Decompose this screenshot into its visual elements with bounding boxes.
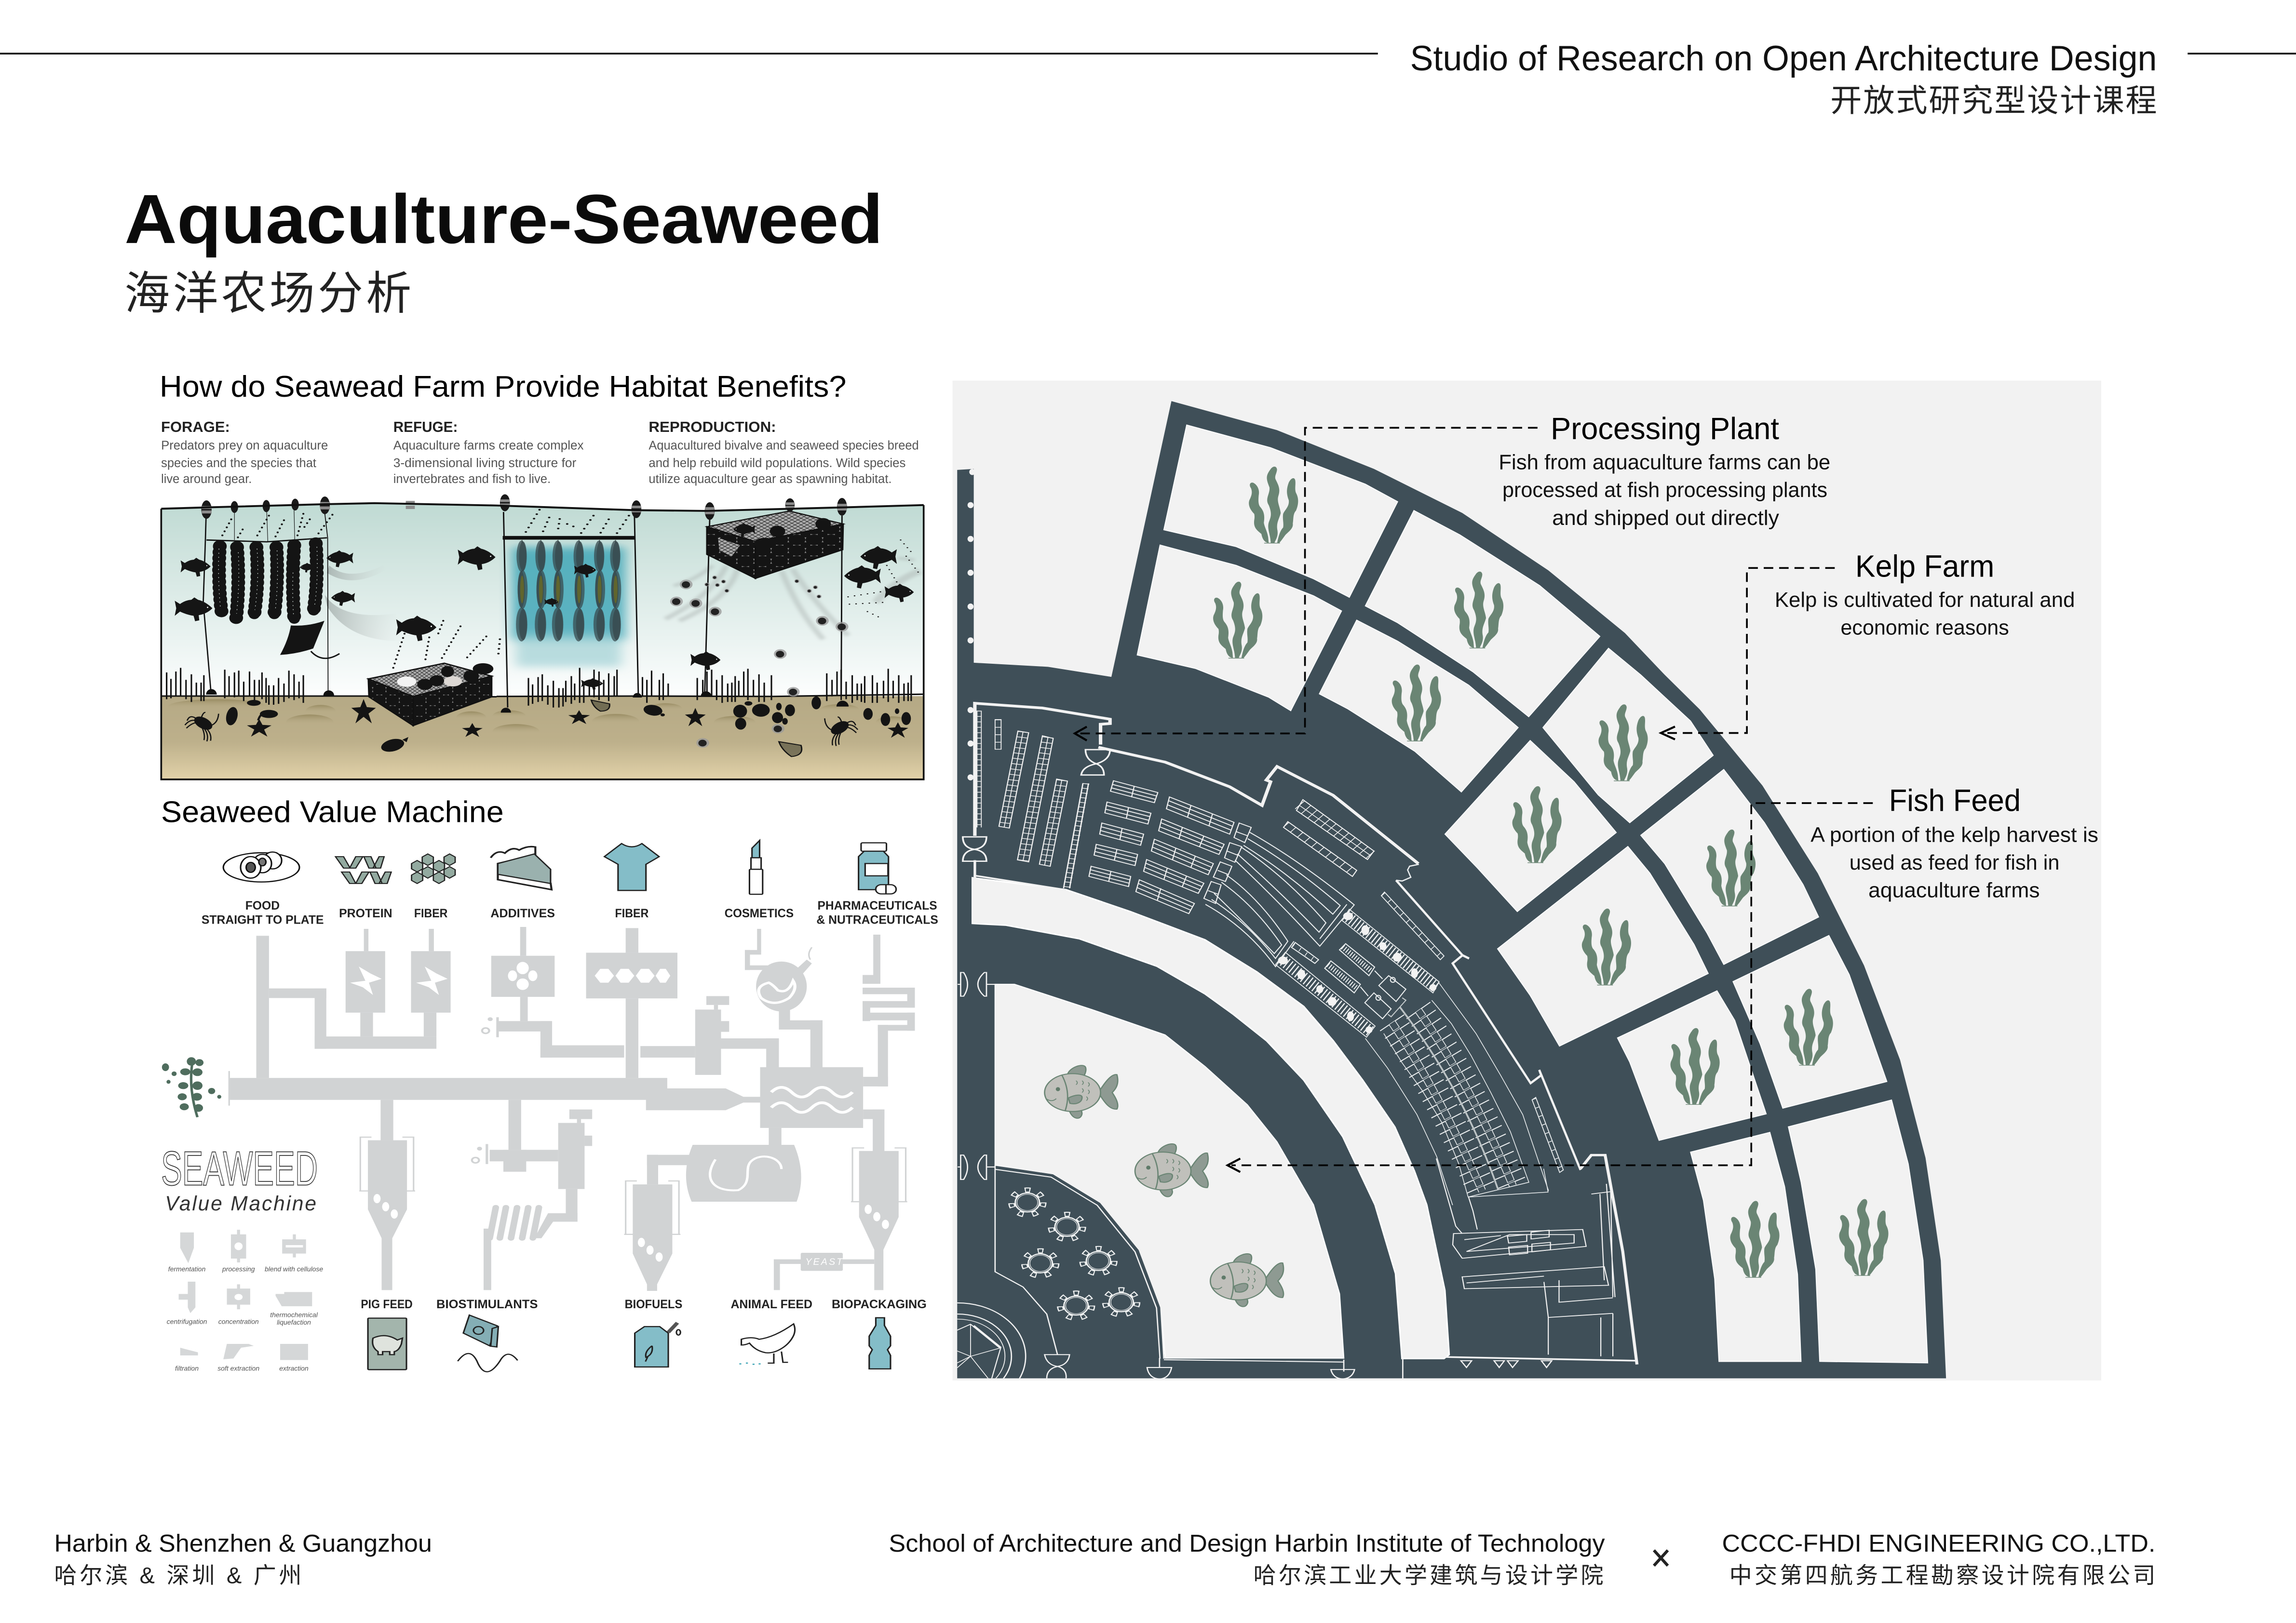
labels: top products: FIBER xyxy=(615,907,648,920)
legend mini icons xyxy=(179,1230,312,1360)
kelp line: refuge xyxy=(503,538,635,642)
mussel columns xyxy=(218,543,317,619)
seabed line left xyxy=(161,696,497,697)
filter equipment xyxy=(1325,944,1406,1019)
labels: top products: COSMETICS xyxy=(725,907,794,920)
text block: reproduction xyxy=(648,419,919,486)
studio title chinese: 开放式研究型设计课程 xyxy=(1830,83,2157,118)
plan: kelp icons xyxy=(1213,467,1889,1277)
callout: processing plant: processed at fish processing plants xyxy=(1502,479,1827,502)
water xyxy=(161,503,924,696)
upper grid racks xyxy=(1283,800,1374,876)
pipe network xyxy=(229,927,915,1291)
hall outer wall continuation xyxy=(1580,1155,1637,1365)
footer: cities: 哈尔滨 & 深圳 & 广州 xyxy=(54,1563,302,1588)
callout: kelp farm: Kelp Farm xyxy=(1855,549,1994,584)
sea floor creatures left xyxy=(185,699,483,754)
arrow: processing plant callout xyxy=(1075,428,1538,740)
text block: forage: live around gear. xyxy=(161,471,252,486)
icon: plate with sushi xyxy=(223,852,299,882)
labels: bottom products: BIOSTIMULANTS xyxy=(436,1298,538,1311)
side racks xyxy=(1381,892,1563,1172)
fish icons xyxy=(1045,1065,1283,1307)
text block: forage: species and the species that xyxy=(161,456,317,470)
nozzle details xyxy=(477,1017,499,1164)
water surface xyxy=(161,503,924,511)
pond outline xyxy=(995,1165,1403,1379)
footer: school xyxy=(889,1529,1605,1588)
legend text: blend with cellulose xyxy=(265,1265,323,1273)
chart: seaweed value machine pipes xyxy=(162,841,915,1372)
footer: cities: Harbin & Shenzhen & Guangzhou xyxy=(54,1529,432,1557)
side doors xyxy=(958,973,1552,1379)
legend text: centrifugation xyxy=(167,1317,207,1325)
coil and brackets xyxy=(359,947,907,1238)
labels: bottom products: PIG FEED xyxy=(361,1298,413,1311)
callout: kelp farm xyxy=(1775,549,2075,640)
heading: value machine: Seaweed Value Machine xyxy=(161,795,504,829)
seagrass left xyxy=(167,668,303,705)
icon: biopackaging bottle xyxy=(869,1318,891,1369)
crossbar xyxy=(206,538,327,542)
icon: biostimulant packet xyxy=(458,1315,518,1372)
bubbles right xyxy=(498,510,629,657)
anchors right xyxy=(501,691,849,712)
current swooshes left xyxy=(327,565,387,580)
footer: company: 中交第四航务工程勘察设计院有限公司 xyxy=(1729,1563,2155,1588)
labels: top products: FIBER xyxy=(414,907,447,920)
seating block xyxy=(1384,1000,1548,1197)
legend text xyxy=(167,1265,323,1372)
text block: refuge: invertebrates and fish to live. xyxy=(393,471,551,486)
text block: refuge: 3-dimensional living structure for xyxy=(393,456,577,470)
plan: processing hall linework upper xyxy=(963,469,1418,913)
text block: reproduction: utilize aquaculture gear as spawning habitat. xyxy=(648,471,892,486)
scene border xyxy=(161,505,924,779)
main subtitle chinese: 海洋农场分析 xyxy=(124,268,411,319)
seabed sand xyxy=(161,696,924,779)
legend text: thermochemical xyxy=(270,1311,318,1319)
icon: biofuel can xyxy=(635,1323,680,1367)
text block: reproduction: REPRODUCTION: xyxy=(648,419,776,435)
footer: company xyxy=(1722,1529,2155,1588)
panel: underwater habitat scene xyxy=(161,494,924,779)
studio title: Studio of Research on Open Architecture Design xyxy=(1410,39,2157,78)
arrow: kelp farm callout xyxy=(1661,568,1835,739)
text block: refuge xyxy=(393,419,584,486)
sprig xyxy=(162,1057,221,1117)
plan: farm cells xyxy=(1137,425,1928,1363)
heading: habitat benefits: How do Seawead Farm Provide Habitat Benefits? xyxy=(160,370,846,403)
labels: bottom products: BIOFUELS xyxy=(625,1298,682,1311)
footer: school: School of Architecture and Design Harbin Institute of Technology xyxy=(889,1529,1605,1557)
seabed line right xyxy=(497,694,923,697)
icon: pig feed bag xyxy=(368,1318,406,1369)
seagrass right xyxy=(528,668,911,708)
labels: bottom products: BIOPACKAGING xyxy=(832,1298,927,1311)
icon: t-shirt xyxy=(604,844,659,890)
long process tanks xyxy=(1205,832,1354,966)
header rule left xyxy=(0,53,1378,54)
door symbols xyxy=(963,750,1110,861)
wordmark: seaweed value machine xyxy=(161,1141,318,1215)
header rule right xyxy=(2188,53,2296,54)
drifting spat xyxy=(670,576,849,748)
labels: bottom products: ANIMAL FEED xyxy=(730,1298,812,1311)
compass floor medallion xyxy=(957,1302,1026,1379)
legend text: processing xyxy=(222,1265,255,1273)
legend text: filtration xyxy=(175,1365,199,1372)
main title: Aquaculture-Seaweed xyxy=(124,180,883,258)
text block: forage: Predators prey on aquaculture xyxy=(161,438,328,452)
round tables xyxy=(1012,1190,1137,1318)
hall outer walls xyxy=(975,703,1418,864)
plan: dark fan silhouette xyxy=(957,401,1946,1378)
sand mounds left xyxy=(168,699,486,730)
racks xyxy=(977,711,1089,888)
legend text: extraction xyxy=(279,1365,309,1372)
sand mounds right xyxy=(492,703,909,739)
labels: top products: PROTEIN xyxy=(339,907,392,920)
dense pump rack lower xyxy=(1275,952,1375,1037)
icon: lipstick xyxy=(749,841,763,894)
callout: kelp farm: Kelp is cultivated for natural and xyxy=(1775,589,2075,612)
plan: processing hall centre xyxy=(1205,832,1580,1205)
callout: fish feed: used as feed for fish in xyxy=(1850,851,2060,874)
legend text: liquefaction xyxy=(277,1318,311,1326)
plan: fish pond xyxy=(995,984,1344,1358)
tank rows xyxy=(1089,781,1251,913)
scene right half xyxy=(492,494,923,757)
wordmark: seaweed value machine: Value Machine xyxy=(165,1193,316,1215)
ropes right xyxy=(503,512,842,708)
legend text: fermentation xyxy=(168,1265,206,1273)
callout: processing plant xyxy=(1499,411,1830,530)
cage on seabed xyxy=(368,663,493,725)
buoys right xyxy=(500,494,847,520)
labels: top products xyxy=(202,899,938,926)
labels: top products: ADDITIVES xyxy=(490,907,555,920)
text block: forage xyxy=(161,419,328,486)
anchors left xyxy=(206,689,334,696)
callout: processing plant: and shipped out directly xyxy=(1552,507,1779,530)
current swooshes right xyxy=(665,558,920,639)
icon: protein helix xyxy=(336,857,391,884)
footer: cities xyxy=(54,1529,432,1588)
callout: processing plant: Processing Plant xyxy=(1551,411,1779,446)
buoys left and marker xyxy=(202,496,415,519)
labels: top products: PHARMACEUTICALS xyxy=(818,899,937,912)
service lines xyxy=(1436,1158,1615,1356)
ropes left xyxy=(203,518,211,690)
icon: hen xyxy=(739,1324,795,1364)
footer: cross mark xyxy=(1654,1550,1668,1566)
kelp glow xyxy=(512,547,625,667)
wordmark: seaweed value machine: SEAWEED xyxy=(161,1141,318,1195)
arrow: fish feed callout xyxy=(1228,803,1873,1172)
callout: fish feed: Fish Feed xyxy=(1889,783,2021,818)
legend text: concentration xyxy=(218,1317,259,1325)
legend text: soft extraction xyxy=(217,1365,259,1372)
hall inner lines xyxy=(1365,983,1549,1205)
text block: reproduction: Aquacultured bivalve and seaweed species breed xyxy=(648,438,919,452)
text block: refuge: REFUGE: xyxy=(393,419,458,435)
text block: forage: FORAGE: xyxy=(161,419,230,435)
text block: refuge: Aquaculture farms create complex xyxy=(393,438,584,452)
panel: site plan background xyxy=(953,381,2101,1381)
plan: processing hall linework lower xyxy=(957,972,1638,1379)
column dots xyxy=(968,469,975,780)
callout: fish feed xyxy=(1810,783,2098,902)
yeast tag: YEAST xyxy=(805,1257,844,1267)
dense pump rack upper xyxy=(1342,909,1439,993)
sea floor creatures right xyxy=(568,697,911,757)
manta ray xyxy=(280,621,339,658)
callout: processing plant: Fish from aquaculture farms can be xyxy=(1499,451,1830,474)
cage floating xyxy=(707,511,843,578)
footer: company: CCCC-FHDI ENGINEERING CO.,LTD. xyxy=(1722,1529,2155,1557)
fish silhouettes xyxy=(175,523,914,690)
plan: light ring band xyxy=(972,878,1449,1358)
callout: fish feed: aquaculture farms xyxy=(1868,879,2040,902)
callout: fish feed: A portion of the kelp harvest is xyxy=(1810,823,2098,846)
labels: top products: & NUTRACEUTICALS xyxy=(816,913,938,926)
labels: top products: STRAIGHT TO PLATE xyxy=(202,913,324,926)
icon: pie xyxy=(491,846,552,890)
callout: kelp farm: economic reasons xyxy=(1840,617,2009,640)
scene left half xyxy=(161,510,497,754)
labels: bottom products xyxy=(361,1298,927,1311)
hall outer wall centre xyxy=(1396,880,1580,1170)
bubbles left xyxy=(221,514,486,670)
icon: pharma bottle xyxy=(859,843,896,894)
labels: top products: FOOD xyxy=(245,899,280,912)
text block: reproduction: and help rebuild wild populations. Wild species xyxy=(648,456,905,470)
footer: school: 哈尔滨工业大学建筑与设计学院 xyxy=(1254,1563,1604,1588)
machine inner white details xyxy=(350,962,889,1261)
icon: fiber hexagons xyxy=(412,854,455,884)
